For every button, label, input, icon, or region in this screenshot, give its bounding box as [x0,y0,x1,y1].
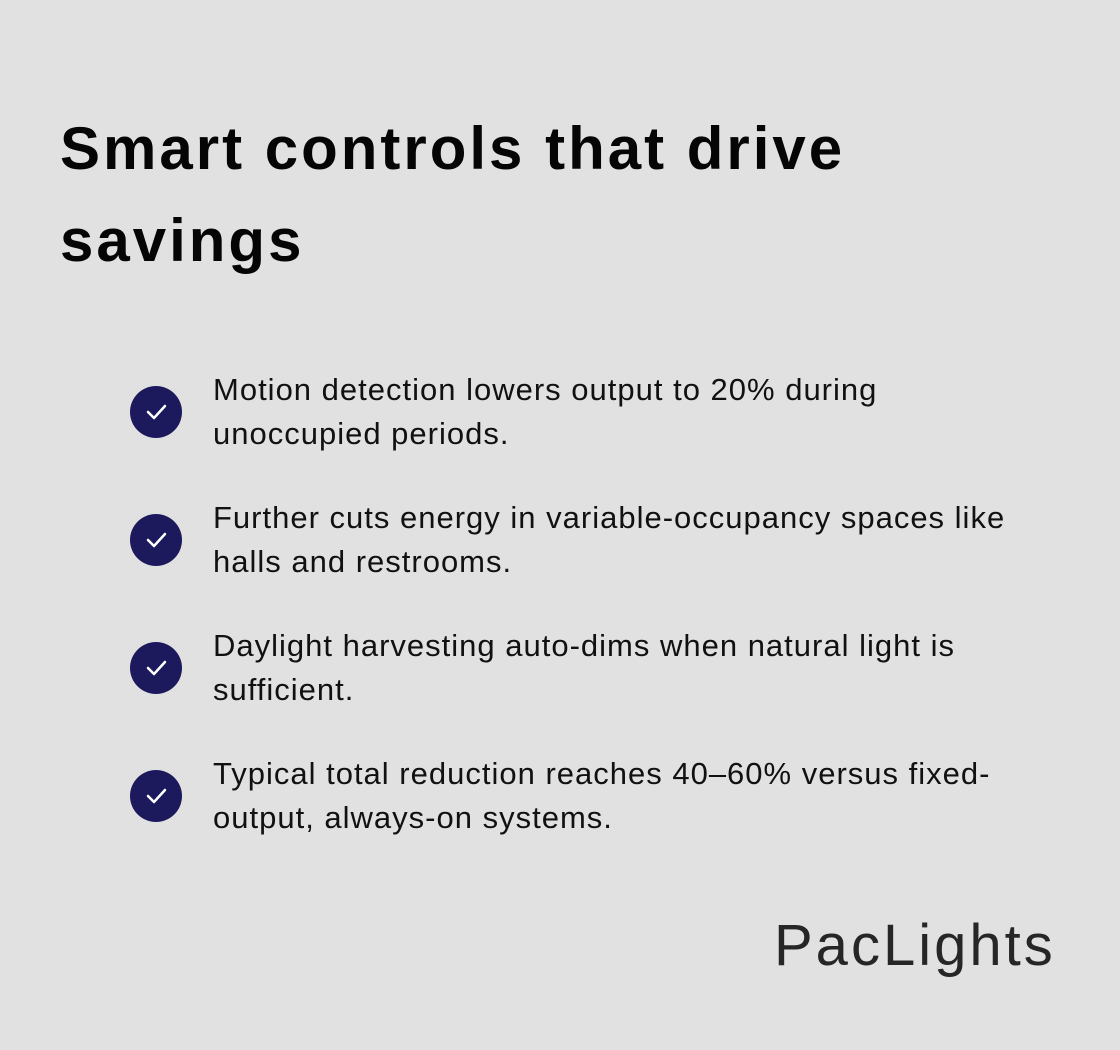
bullet 1 [130,372,877,451]
icon: check [130,770,182,822]
text: Typical total reduction reaches 40–60% versus fixed-output, always-on systems. [213,756,990,835]
title: Smart controls that drive [60,115,845,182]
title [60,115,845,274]
title: savings [60,207,304,274]
icon: check [130,642,182,694]
text: Daylight harvesting auto-dims when natural light is sufficient. [213,628,955,707]
icon: check [130,514,182,566]
bullet 2 [130,500,1005,579]
text: Motion detection lowers output to 20% during unoccupied periods. [213,372,877,451]
text: Further cuts energy in variable-occupancy spaces like halls and restrooms. [213,500,1005,579]
icon: check [130,386,182,438]
bullet 4 [130,756,990,835]
logo: PacLights [774,913,1056,978]
bullet 3 [130,628,955,707]
